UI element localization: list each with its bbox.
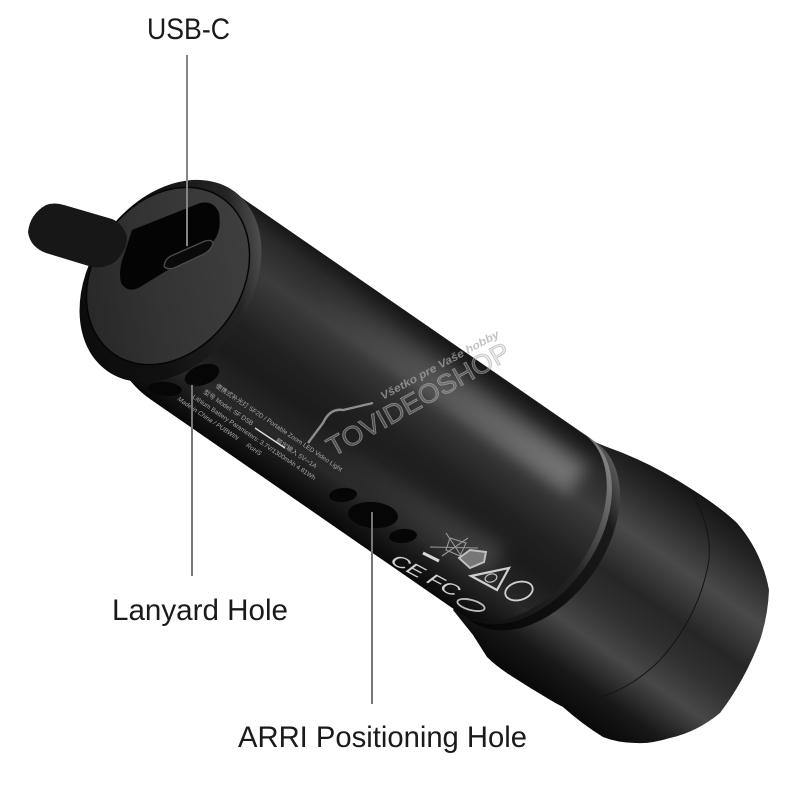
lamp head xyxy=(453,432,769,743)
collar ring xyxy=(405,395,655,663)
printed specifications: 便携式补光灯 SF2D / Portable Zoom LED Video Light xyxy=(214,381,345,474)
rubber tab xyxy=(28,204,127,267)
collar inner band xyxy=(405,395,647,657)
USB-C port xyxy=(164,240,213,269)
C-tick triangle xyxy=(471,568,509,590)
printed specifications: 型号 Model: SF DSB 额定输入 5V⎓1A xyxy=(202,387,320,471)
body highlights xyxy=(341,311,592,574)
certification marks xyxy=(385,533,535,613)
label: Lanyard Hole: Lanyard Hole xyxy=(112,594,288,627)
watermark logo swoosh xyxy=(308,403,373,443)
body tube xyxy=(118,191,607,621)
label: USB-C: USB-C xyxy=(147,13,230,46)
upper highlight streak xyxy=(341,311,592,498)
watermark xyxy=(308,328,515,462)
second lanyard hole xyxy=(147,381,183,397)
CE and FC marks: CE FC xyxy=(385,552,467,599)
port slot xyxy=(120,202,220,290)
flashlight product illustration xyxy=(28,145,769,743)
printed specifications: Made in China / PUBWIN RoHS xyxy=(176,396,263,458)
C-tick inner circle xyxy=(484,573,498,583)
printed specifications xyxy=(176,381,345,482)
dash mark xyxy=(423,553,439,561)
printed specifications: Lithium Battery Parameters: 3.7V/1300mAh 4.81Wh xyxy=(191,394,317,482)
end cap xyxy=(28,145,299,417)
callout line: USB-C xyxy=(186,55,188,246)
circle mark xyxy=(503,579,535,603)
watermark name: TOVIDEOSHOP xyxy=(321,337,515,462)
callout line: ARRI hole xyxy=(371,512,373,704)
recycling mark xyxy=(459,550,486,568)
callout line: lanyard hole xyxy=(191,385,193,576)
WEEE bin mark xyxy=(430,533,478,557)
small hole right xyxy=(388,528,418,544)
head seam line xyxy=(580,490,709,702)
small hole left xyxy=(328,487,358,503)
cap inner disc xyxy=(53,156,283,396)
white divider bar xyxy=(255,428,285,448)
cap outer ring xyxy=(42,145,299,417)
ARRI hole xyxy=(347,500,399,530)
lanyard hole xyxy=(182,359,222,391)
collar outer band xyxy=(413,401,655,663)
watermark slogan: Všetko pre Vaše hobby xyxy=(379,328,502,403)
lower highlight streak xyxy=(359,462,506,574)
mounting holes xyxy=(147,359,418,544)
small mark xyxy=(456,597,486,613)
label: ARRI Positioning Hole: ARRI Positioning Hole xyxy=(238,721,527,754)
